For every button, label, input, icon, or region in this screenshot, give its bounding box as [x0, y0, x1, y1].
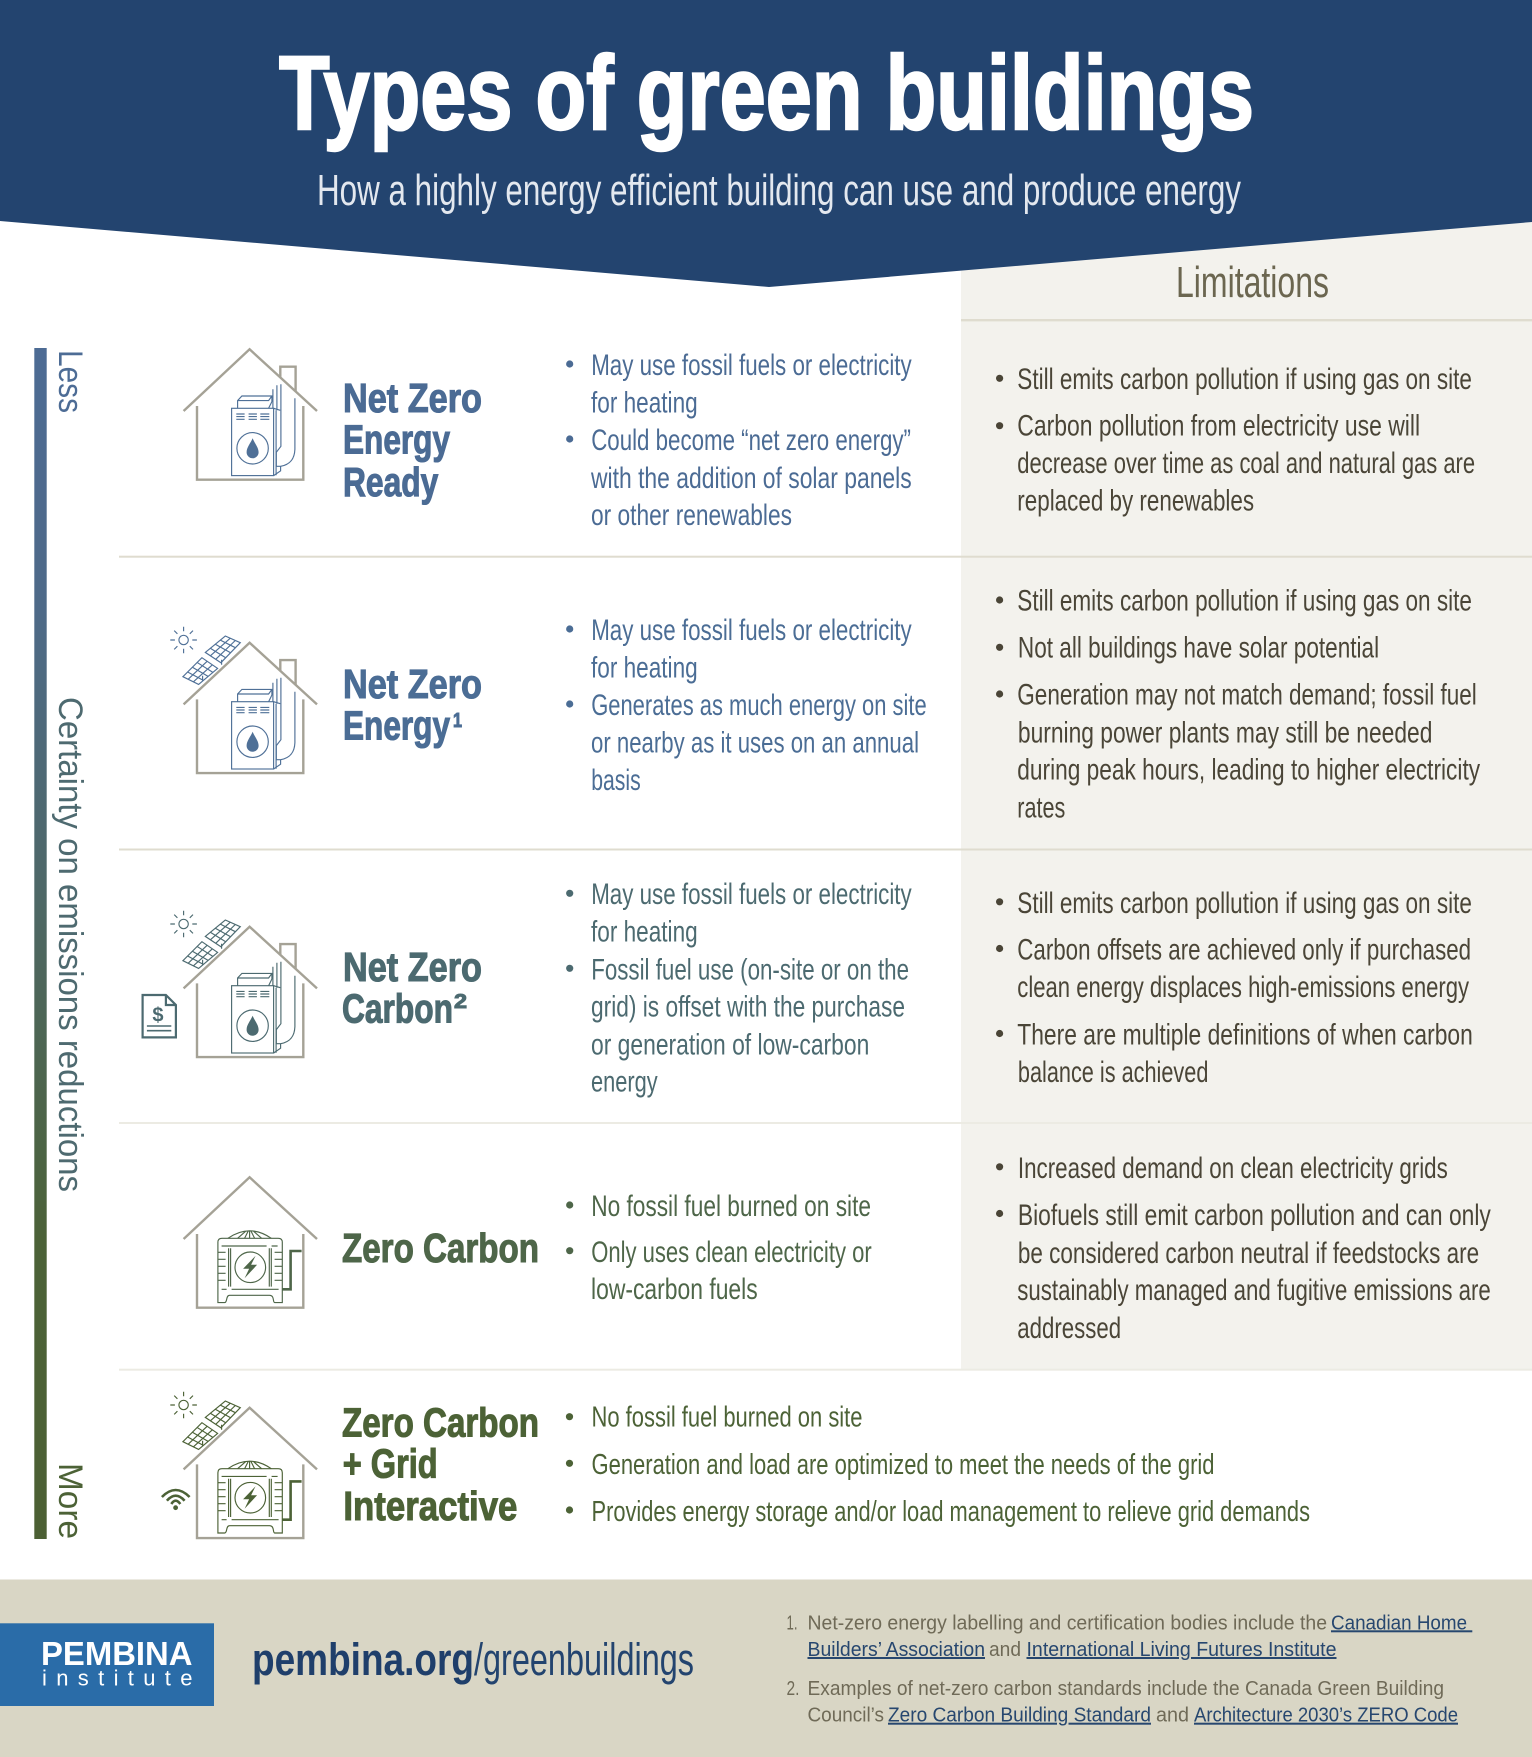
bullet list: Could become “net zero energy” [591, 424, 911, 457]
title: Types of green buildings [279, 35, 1254, 152]
heading: 1 [453, 710, 462, 732]
panel: net zero energy [170, 585, 1480, 824]
bullet list: May use fossil fuels or electricity [591, 878, 912, 911]
heading [342, 1400, 539, 1529]
bullet list [566, 878, 912, 1099]
icon: house with heat pump [184, 1177, 317, 1308]
limitations list [996, 585, 1480, 824]
heading [343, 375, 482, 505]
heading: Net Zero [343, 661, 482, 707]
footnotes: 2. [786, 1678, 800, 1700]
bullet list: May use fossil fuels or electricity [591, 614, 912, 647]
axis label: certainty: Certainty on emissions reductions [51, 697, 89, 1192]
heading: Carbon [342, 986, 453, 1032]
bullet list: No fossil fuel burned on site [592, 1402, 862, 1434]
icon: house with furnace [184, 349, 317, 480]
footnotes: Builders’ Association [808, 1639, 985, 1661]
limitations list: Not all buildings have solar potential [1018, 631, 1379, 664]
panel: zero carbon + grid interactive [162, 1392, 1310, 1538]
icon: offset document: $ [152, 1005, 163, 1027]
heading: Net Zero [343, 375, 482, 421]
footnotes: and [1156, 1705, 1189, 1727]
limitations list: addressed [1017, 1312, 1121, 1345]
bullet list: or other renewables [591, 499, 792, 532]
limitations list: replaced by renewables [1017, 485, 1254, 518]
axis label: less: Less [51, 350, 89, 413]
icon: house with furnace, solar and offset document [143, 911, 317, 1057]
bullet list: basis [591, 764, 641, 797]
bullet list: Generation and load are optimized to meet the needs of the grid [592, 1449, 1214, 1481]
bullet list: Generates as much energy on site [591, 689, 927, 722]
limitations list: Carbon pollution from electricity use will [1017, 410, 1420, 443]
heading: Zero Carbon [342, 1225, 539, 1271]
panel: limitations column background [961, 222, 1532, 1370]
heading [343, 661, 482, 748]
heading: 2 [454, 991, 467, 1013]
bullet list: with the addition of solar panels [590, 462, 912, 495]
panel: net zero energy ready [184, 349, 1475, 532]
bullet list: for heating [591, 652, 698, 685]
footnotes: and [989, 1639, 1021, 1661]
bullet list [566, 349, 912, 532]
footer [0, 1580, 1532, 1757]
panel: net zero carbon [143, 878, 1473, 1099]
header banner [0, 0, 1532, 287]
bullet list [566, 1190, 872, 1306]
limitations list [996, 363, 1475, 518]
footnotes: Examples of net-zero carbon standards include the Canada Green Building [808, 1678, 1444, 1700]
bullet list: grid) is offset with the purchase [591, 991, 905, 1024]
heading: Net Zero [343, 944, 482, 990]
limitations list: rates [1017, 791, 1065, 824]
website url: /greenbuildings [474, 1634, 694, 1685]
icon: offset document [143, 995, 176, 1037]
footnotes [786, 1612, 1472, 1727]
limitations list [996, 1152, 1491, 1345]
heading [342, 944, 482, 1032]
icon: wifi [162, 1490, 190, 1510]
bullet list: for heating [591, 916, 698, 949]
footnotes: Zero Carbon Building Standard [888, 1705, 1151, 1727]
footnotes: Council’s [808, 1705, 884, 1727]
bullet list: No fossil fuel burned on site [591, 1190, 871, 1223]
icon: house with heat pump, solar and wifi [162, 1392, 317, 1538]
footnotes: 1. [786, 1612, 798, 1634]
axis label: more: More [51, 1463, 89, 1539]
bullet list: low-carbon fuels [591, 1273, 758, 1306]
heading: Ready [343, 459, 438, 505]
bullet list: energy [591, 1066, 658, 1099]
heading: Interactive [343, 1483, 517, 1529]
website url: pembina.org [252, 1634, 474, 1685]
footnotes: Net-zero energy labelling and certification bodies include the [808, 1612, 1327, 1634]
limitations list: balance is achieved [1018, 1056, 1208, 1089]
icon: house with furnace and solar [170, 627, 317, 773]
bullet list: Provides energy storage and/or load management to relieve grid demands [592, 1496, 1310, 1528]
bullet list [566, 614, 927, 797]
limitations list [996, 887, 1473, 1089]
heading: Energy [343, 416, 450, 462]
website url [252, 1634, 694, 1685]
bullet list [566, 1402, 1310, 1528]
logo: pembina institute [0, 1623, 214, 1706]
footnotes: Architecture 2030’s ZERO Code [1194, 1705, 1458, 1727]
bullet list: or nearby as it uses on an annual [591, 727, 919, 760]
footnotes: Canadian Home [1331, 1612, 1472, 1634]
panel: zero carbon [184, 1152, 1491, 1345]
logo: pembina institute: institute [42, 1666, 192, 1691]
bullet list: May use fossil fuels or electricity [591, 349, 912, 382]
bullet list: for heating [591, 387, 698, 420]
logo: pembina institute: PEMBINA [41, 1635, 192, 1672]
heading: Energy [343, 702, 450, 748]
heading: Zero Carbon [342, 1400, 539, 1446]
heading: limitations: Limitations [1176, 258, 1329, 307]
heading: + Grid [343, 1441, 438, 1487]
footnotes: International Living Futures Institute [1026, 1639, 1336, 1661]
bullet list: Fossil fuel use (on-site or on the [591, 953, 909, 986]
bullet list: or generation of low-carbon [591, 1028, 869, 1061]
bullet list: Only uses clean electricity or [591, 1236, 872, 1269]
axis: certainty on emissions reductions [34, 348, 89, 1539]
